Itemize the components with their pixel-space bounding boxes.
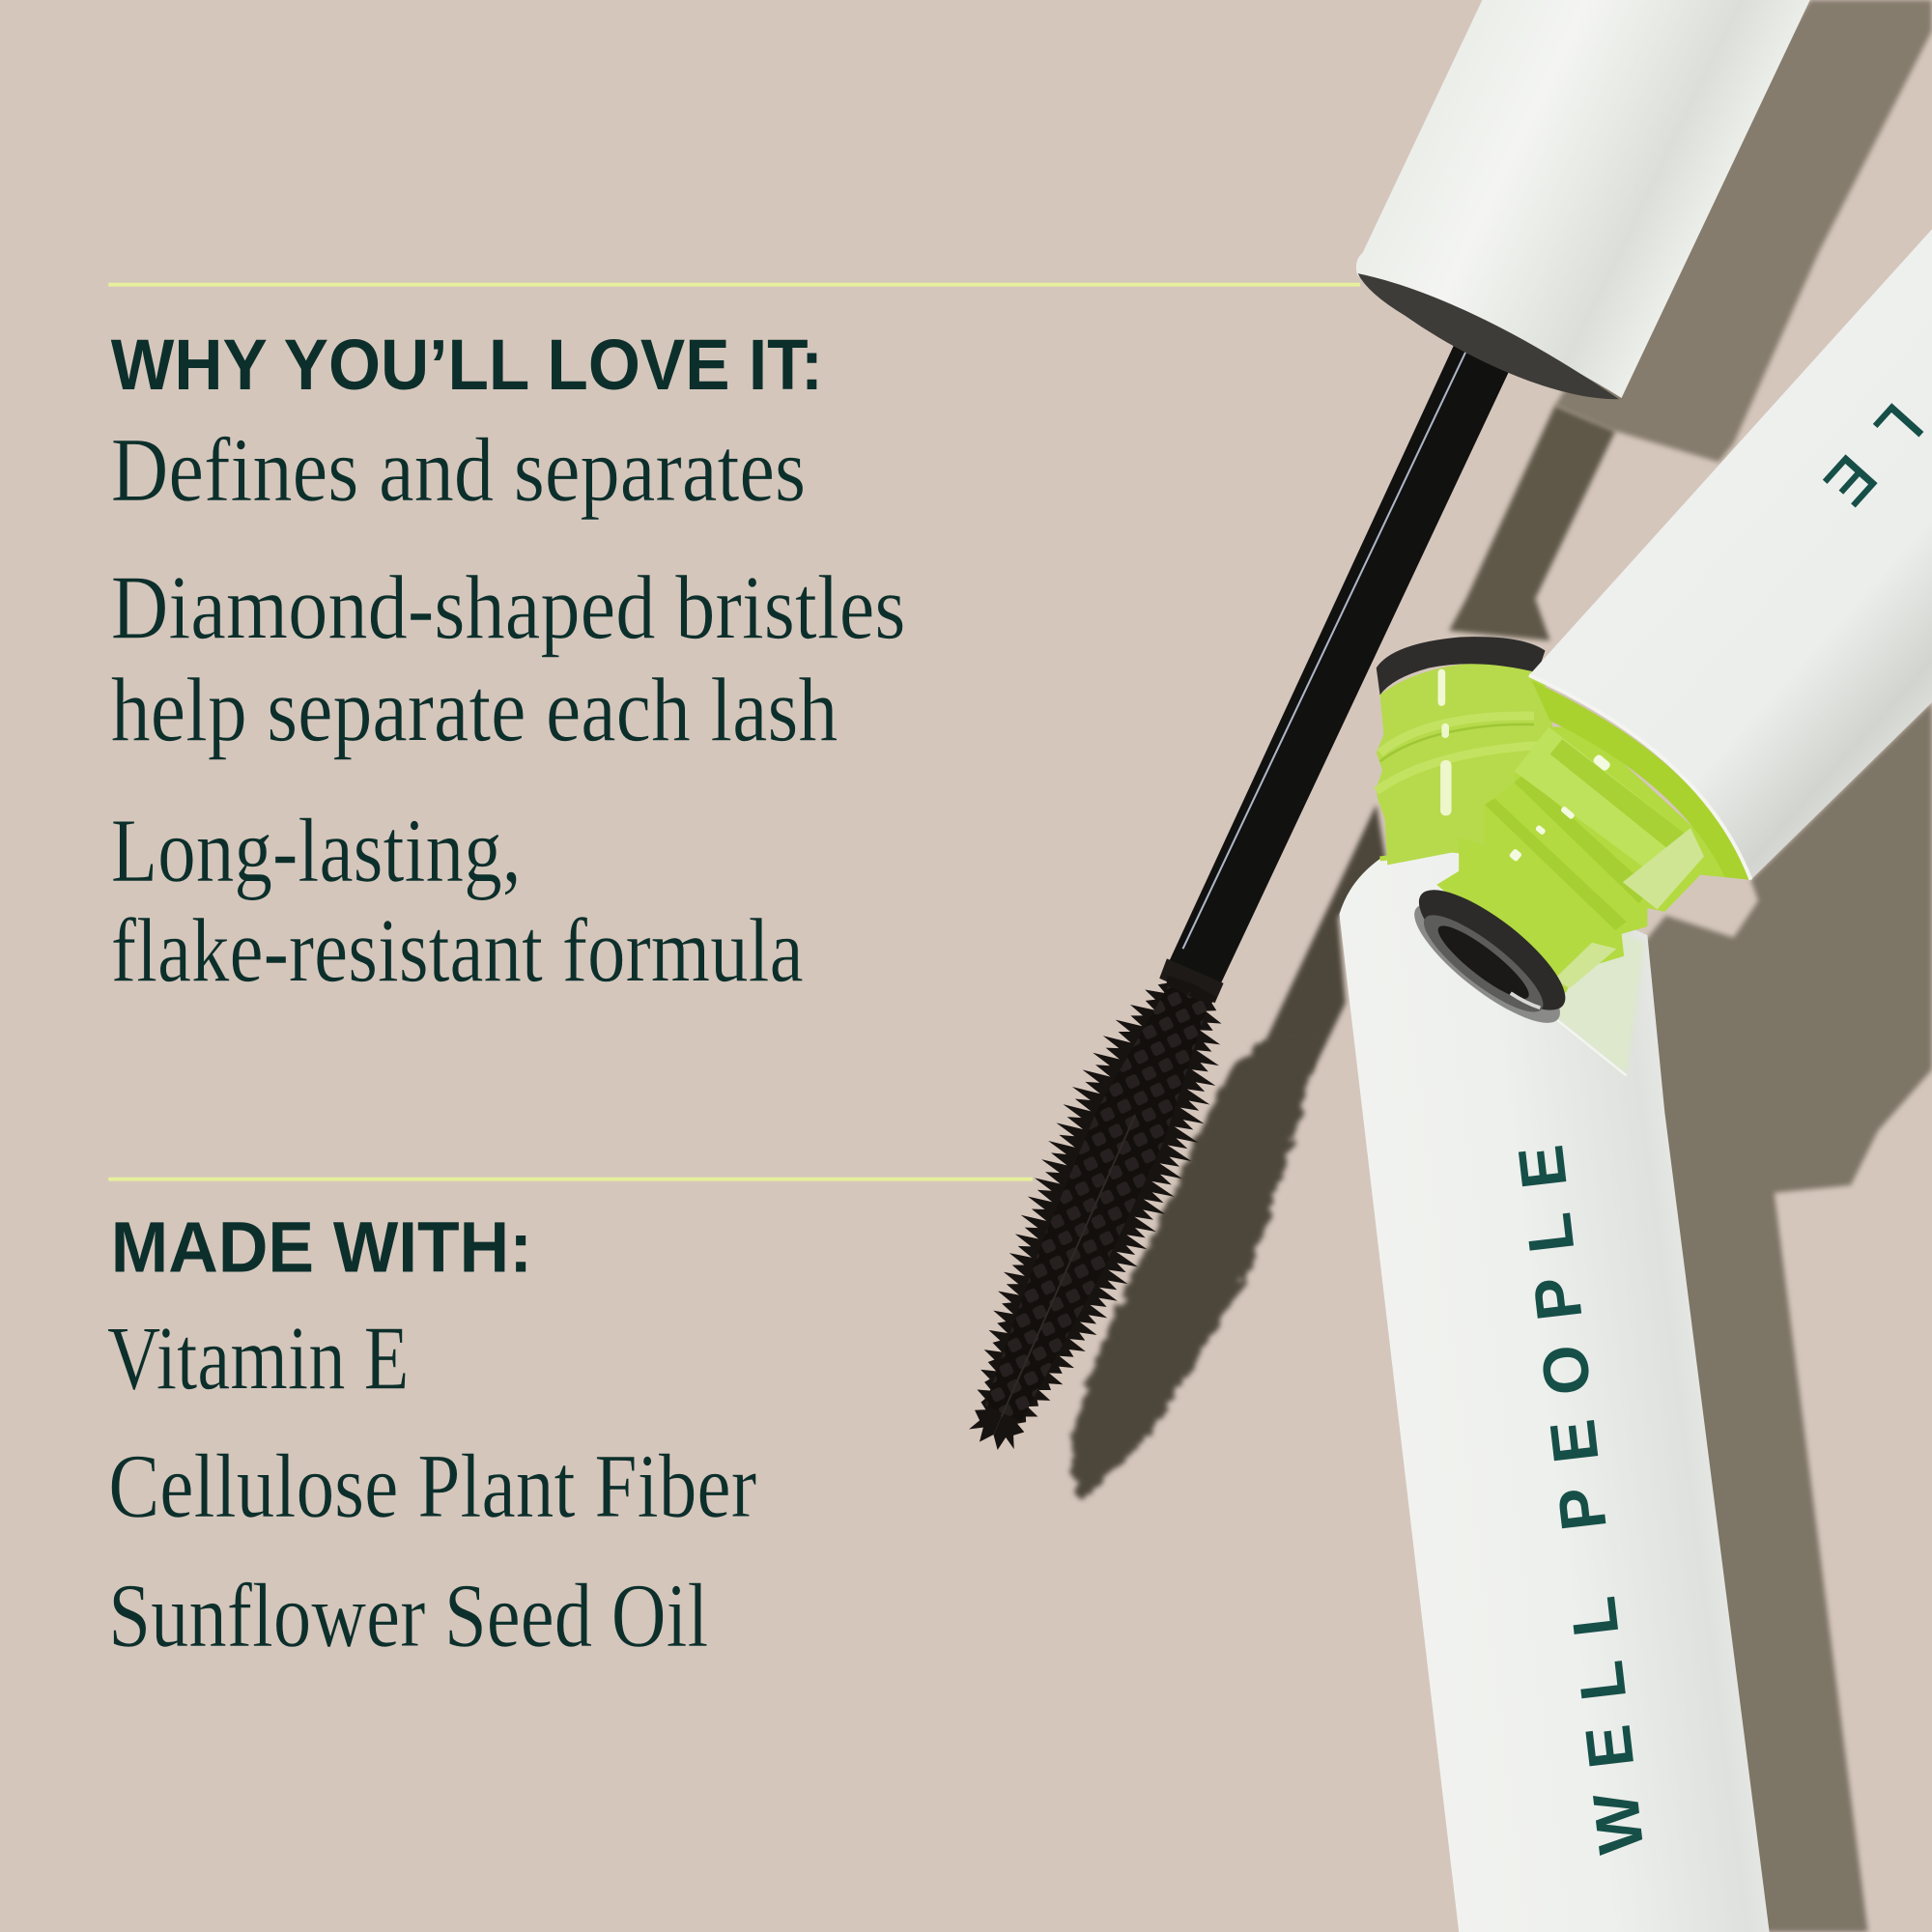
shadow: wand upper bbox=[1449, 406, 1615, 640]
benefits text block: Diamond-shaped bristles bbox=[111, 558, 905, 659]
ingredients text block bbox=[107, 1308, 756, 1666]
logo fragment on upper tube: LE bbox=[1812, 391, 1932, 518]
cap bbox=[1356, 0, 1810, 399]
mascara wand bbox=[1159, 329, 1517, 1003]
back green neck bbox=[1377, 637, 1555, 865]
shadow: tubes on the right bbox=[1638, 702, 1932, 1932]
divider: made with bbox=[108, 1178, 1033, 1181]
ingredients text block: Sunflower Seed Oil bbox=[108, 1566, 708, 1666]
benefits text block bbox=[111, 420, 906, 1001]
back neck black cap bbox=[1377, 637, 1545, 695]
shadow: wand lower bbox=[1256, 805, 1386, 1069]
logo on lower tube: WELL PEOPLE bbox=[1505, 1142, 1658, 1858]
wand collar bbox=[1159, 958, 1224, 1003]
ingredients text block: Cellulose Plant Fiber bbox=[108, 1436, 756, 1537]
lower tube bbox=[1339, 849, 1770, 1932]
front neck black ring and opening bbox=[1400, 871, 1581, 1040]
mascara brush bbox=[924, 955, 1258, 1474]
benefits text block: Defines and separates bbox=[111, 420, 806, 521]
upper tube green collar bbox=[1531, 680, 1750, 880]
benefits text block: help separate each lash bbox=[111, 661, 838, 761]
shadow: cap bbox=[1555, 0, 1932, 462]
shadow: brush bbox=[1072, 1035, 1321, 1497]
neck highlights bbox=[1509, 753, 1611, 862]
upper tube bbox=[1529, 229, 1932, 880]
benefits text block: flake-resistant formula bbox=[111, 900, 804, 1001]
heading: made with: MADE WITH: bbox=[111, 1207, 532, 1287]
neck step shading bbox=[1515, 774, 1651, 903]
heading: why you'll love it: WHY YOU’LL LOVE IT: bbox=[111, 325, 823, 405]
front green neck bbox=[1436, 727, 1750, 993]
divider: why you'll love it bbox=[108, 283, 1360, 287]
ingredients text block: Vitamin E bbox=[107, 1308, 409, 1408]
benefits text block: Long-lasting, bbox=[111, 801, 522, 901]
